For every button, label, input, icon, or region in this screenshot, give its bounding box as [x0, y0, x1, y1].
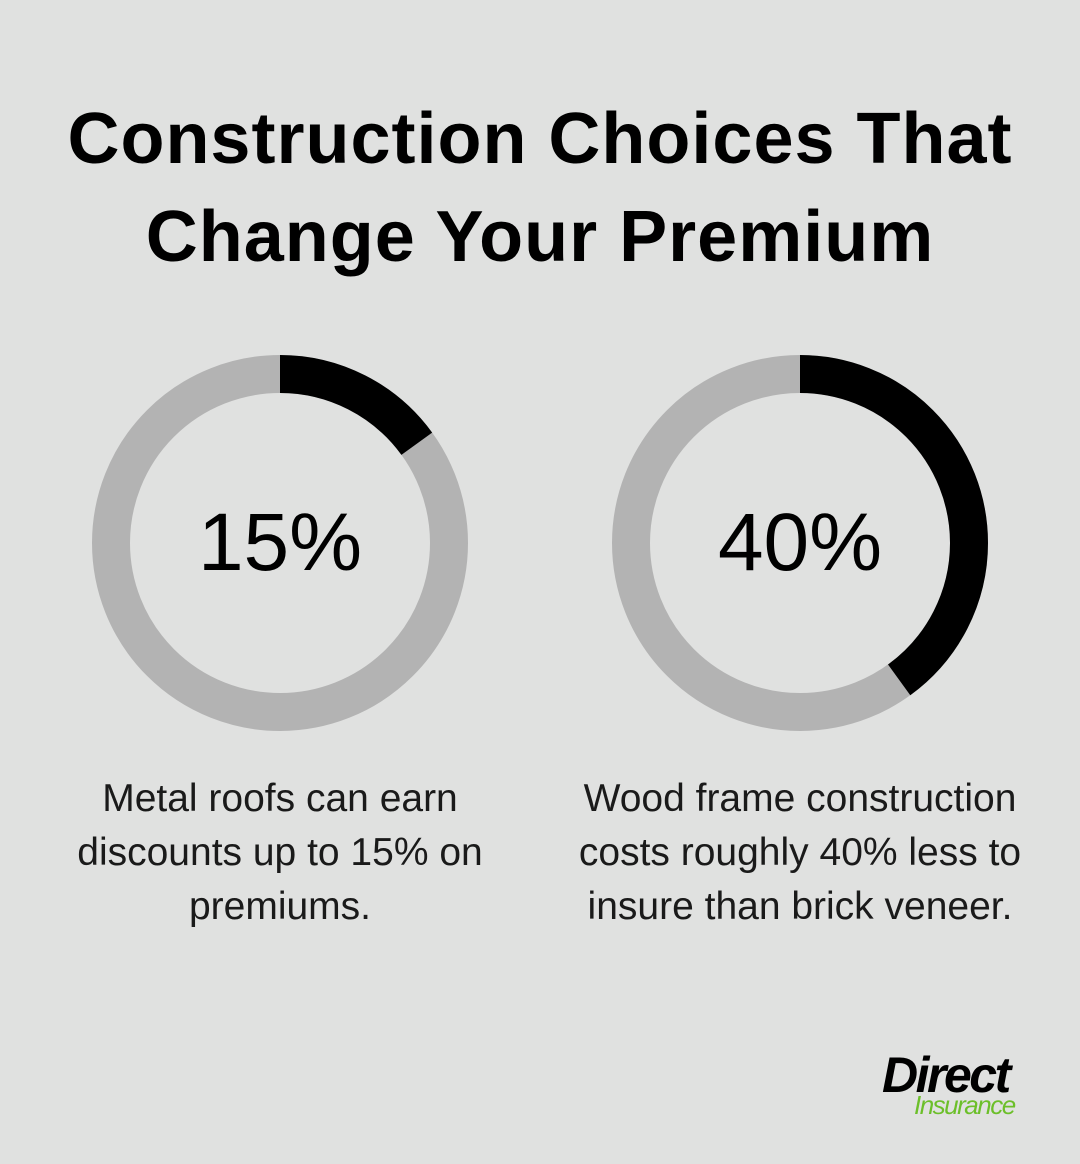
title: Change Your Premium: [146, 197, 934, 277]
donut: 15%: [92, 355, 468, 731]
logo: Insurance: [914, 1090, 1015, 1120]
donut: 40%: 40%: [718, 497, 882, 588]
caption: wood frame: Wood frame construction costs roughly 40% less to insure than brick veneer.: [579, 777, 1021, 928]
donut: 40%: [612, 355, 988, 731]
logo: Direct: [882, 1047, 1009, 1103]
caption: metal roofs: Metal roofs can earn discounts up to 15% on premiums.: [77, 777, 483, 928]
donut: 15%: 15%: [198, 497, 362, 588]
title: Construction Choices That: [67, 99, 1013, 179]
title: [67, 99, 1013, 277]
